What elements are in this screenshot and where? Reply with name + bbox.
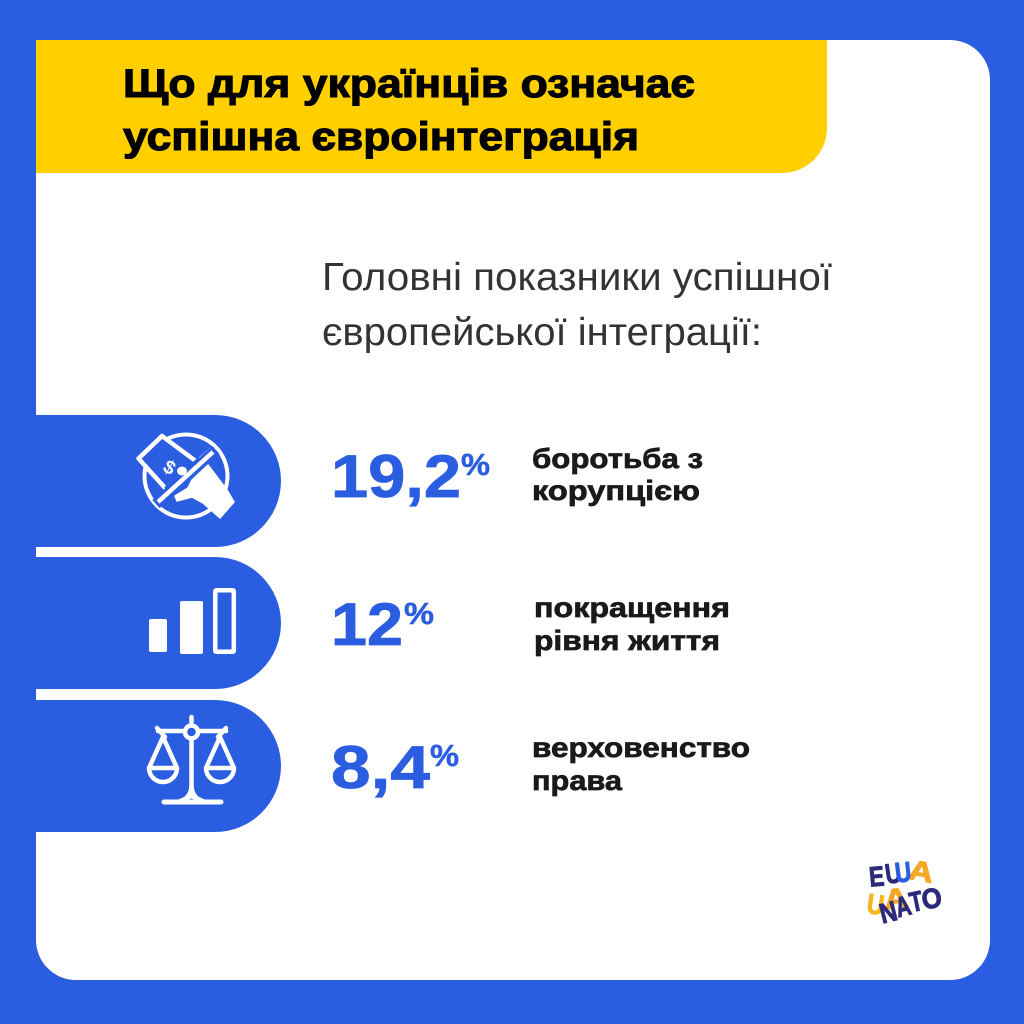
value 8,4% bbox=[331, 734, 459, 801]
header banner bbox=[36, 40, 827, 173]
icon: no bribery bbox=[138, 434, 234, 518]
logo: EU UA NATO: E bbox=[868, 860, 885, 893]
value 19,2%: % bbox=[461, 447, 490, 482]
title: успішна євроінтеграція bbox=[123, 115, 639, 159]
title bbox=[123, 62, 695, 159]
label: anti-corruption bbox=[532, 443, 703, 506]
icon: no bribery: $ bbox=[159, 456, 179, 480]
blue tab 3 bbox=[36, 700, 281, 832]
row: corruption bbox=[36, 415, 703, 547]
label: anti-corruption: боротьба з bbox=[532, 443, 703, 474]
label: rule of law bbox=[532, 732, 750, 796]
value 12%: 12 bbox=[331, 591, 403, 658]
label: living standards: покращення bbox=[534, 592, 730, 623]
logo: EU UA NATO: T bbox=[907, 885, 926, 918]
logo: EU UA NATO: N bbox=[876, 895, 900, 929]
subtitle bbox=[322, 256, 832, 354]
subtitle: європейської інтеграції: bbox=[322, 311, 762, 354]
logo: EU UA NATO: U bbox=[893, 856, 913, 889]
blue tab 2 bbox=[36, 557, 281, 689]
logo: EU UA NATO: A bbox=[882, 882, 910, 915]
blue tab 1 bbox=[36, 415, 281, 547]
value 8,4%: 8,4 bbox=[331, 734, 431, 801]
row: rule of law bbox=[36, 700, 750, 832]
label: living standards: рівня життя bbox=[534, 625, 720, 656]
value 19,2%: 19,2 bbox=[331, 443, 461, 510]
logo: EU UA NATO: O bbox=[919, 882, 944, 916]
logo: EU UA NATO bbox=[865, 854, 944, 929]
subtitle: Головні показники успішної bbox=[322, 256, 832, 299]
label: anti-corruption: корупцією bbox=[532, 475, 700, 506]
title: Що для українців означає bbox=[123, 62, 695, 106]
icon: bar chart bbox=[149, 590, 234, 654]
logo: EU UA NATO: A bbox=[906, 854, 936, 889]
label: rule of law: верховенство bbox=[532, 732, 750, 763]
row: living standards bbox=[36, 557, 730, 689]
label: rule of law: права bbox=[532, 765, 622, 796]
label: living standards bbox=[534, 592, 730, 656]
value 12%: % bbox=[404, 596, 434, 631]
logo: EU UA NATO: A bbox=[892, 890, 914, 923]
logo: EU UA NATO: U bbox=[865, 888, 886, 921]
icon: scales bbox=[149, 717, 234, 802]
logo: EU UA NATO: U bbox=[883, 857, 903, 890]
value 8,4%: % bbox=[430, 738, 459, 773]
value 12% bbox=[331, 591, 434, 658]
